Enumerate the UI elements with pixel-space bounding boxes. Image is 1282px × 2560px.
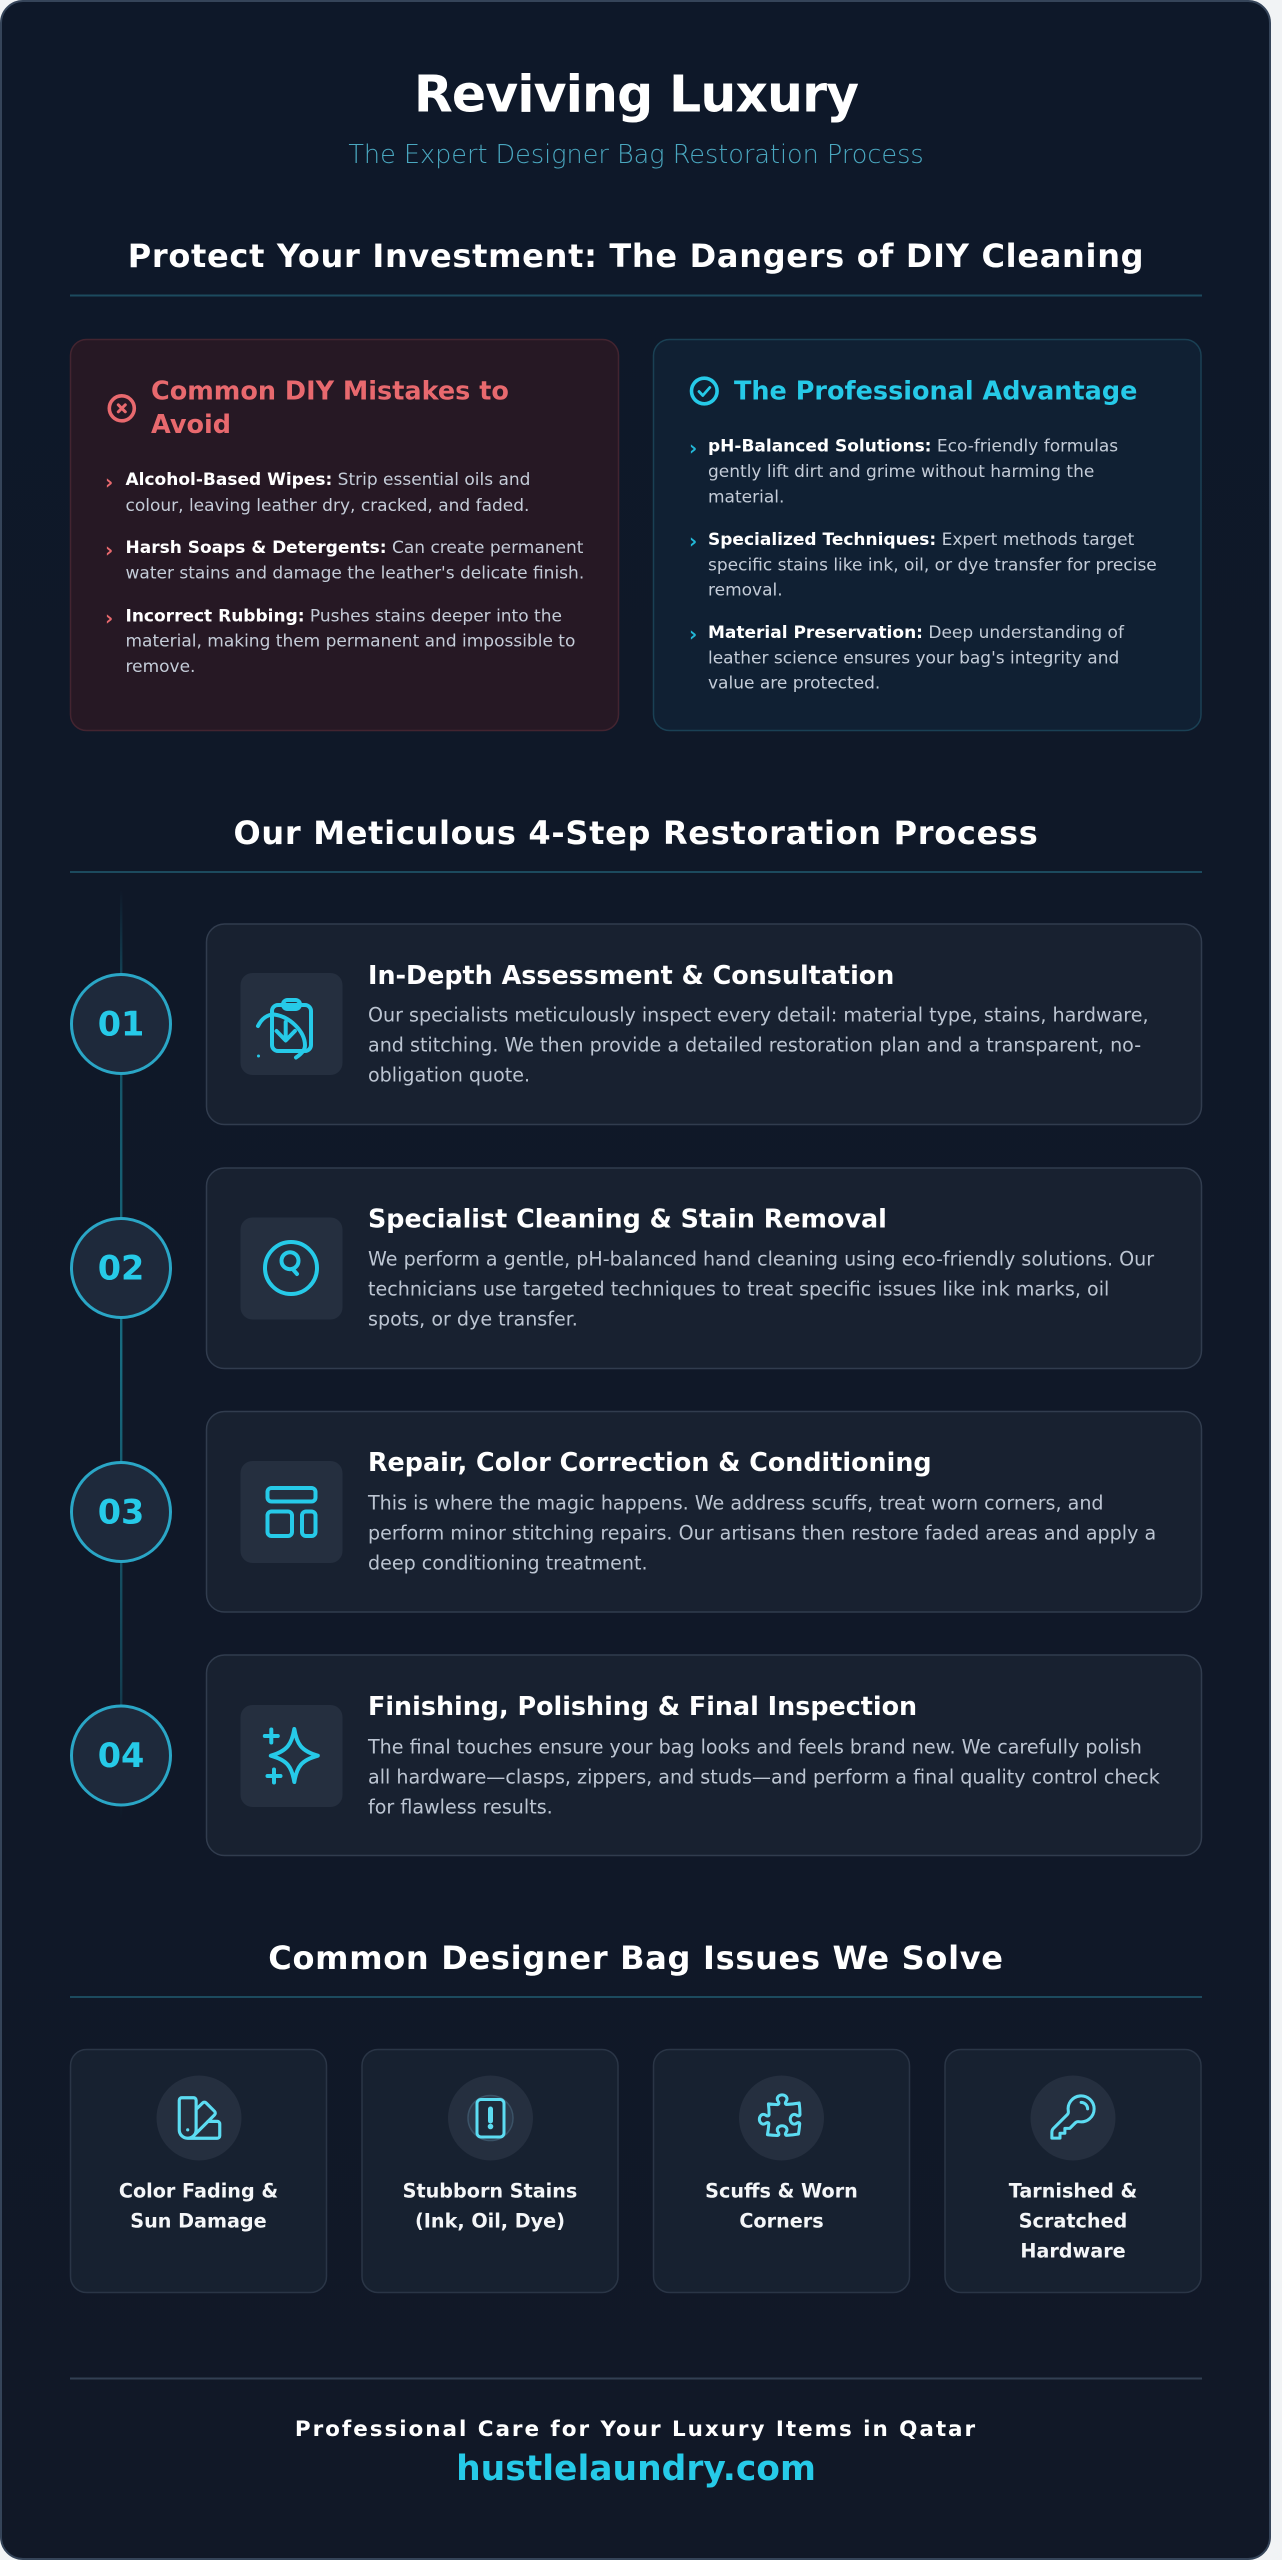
step 4 text: for flawless results. bbox=[368, 1795, 553, 1818]
advantage list: leather science ensures your bag's integrity and bbox=[708, 648, 1119, 668]
advantage list: › bbox=[689, 622, 697, 646]
label: Scratched bbox=[1019, 2209, 1127, 2232]
icon: alert device bbox=[448, 2076, 533, 2160]
advantage list bbox=[689, 436, 1157, 694]
step 3 text: This is where the magic happens. We address scuffs, treat worn corners, and bbox=[367, 1491, 1104, 1514]
subtitle: The Expert Designer Bag Restoration Process bbox=[348, 140, 924, 170]
mistakes list: water stains and damage the leather's delicate finish. bbox=[126, 564, 584, 584]
step 1 card bbox=[206, 924, 1202, 1124]
step 3 number bbox=[72, 1462, 170, 1562]
advantage list: gently lift dirt and grime without harming the bbox=[708, 462, 1094, 482]
step 1 number bbox=[72, 974, 170, 1074]
label bbox=[403, 2179, 577, 2232]
mistakes list: Alcohol-Based Wipes: Strip essential oils and bbox=[126, 470, 530, 490]
label: Color Fading & bbox=[119, 2179, 278, 2202]
panel: common DIY mistakes bbox=[70, 340, 618, 730]
panel: professional advantage bbox=[654, 340, 1201, 730]
step 1 bbox=[72, 924, 1202, 1124]
icon: magnifier in circle bbox=[240, 1218, 342, 1320]
step 1 number: 01 bbox=[98, 1004, 144, 1044]
label: Scuffs & Worn bbox=[705, 2179, 858, 2202]
step 1 text: obligation quote. bbox=[368, 1064, 530, 1087]
label: Sun Damage bbox=[130, 2209, 267, 2232]
issue card: color fading bbox=[70, 2050, 326, 2292]
heading: dangers of DIY: Protect Your Investment: The Dangers of DIY Cleaning bbox=[128, 237, 1144, 275]
step 4 heading: Finishing, Polishing & Final Inspection bbox=[368, 1691, 917, 1721]
timeline line bbox=[120, 890, 122, 1820]
step 2 number: 02 bbox=[98, 1248, 144, 1288]
issue card: hardware bbox=[945, 2050, 1201, 2292]
mistakes list: Harsh Soaps & Detergents: Can create permanent bbox=[126, 538, 584, 558]
step 4 number bbox=[72, 1706, 170, 1805]
mistakes heading bbox=[151, 376, 509, 440]
step 3 heading: Repair, Color Correction & Conditioning bbox=[368, 1447, 932, 1477]
advantage list: › bbox=[689, 529, 697, 553]
step 2 bbox=[72, 1168, 1202, 1368]
advantage list: specific stains like ink, oil, or dye transfer for precise bbox=[708, 555, 1157, 575]
label: Corners bbox=[739, 2209, 824, 2232]
step 2 text: spots, or dye transfer. bbox=[368, 1308, 578, 1330]
mistakes list: remove. bbox=[126, 657, 195, 677]
icon: key bbox=[1030, 2076, 1116, 2160]
step 2 text: We perform a gentle, pH-balanced hand cleaning using eco-friendly solutions. Our bbox=[368, 1248, 1154, 1270]
mistakes list: › bbox=[105, 606, 113, 630]
issue card: scuffs bbox=[654, 2050, 910, 2292]
step 2 number bbox=[72, 1218, 170, 1318]
step 3 number: 03 bbox=[98, 1492, 144, 1532]
step 3 text: perform minor stitching repairs. Our artisans then restore faded areas and apply a bbox=[368, 1521, 1156, 1544]
mistakes list bbox=[105, 470, 584, 677]
issue card: stains bbox=[362, 2050, 618, 2292]
advantage heading: The Professional Advantage bbox=[734, 376, 1137, 406]
advantage list: Specialized Techniques: Expert methods target bbox=[708, 530, 1135, 550]
advantage list: › bbox=[689, 436, 697, 460]
step 1 text: Our specialists meticulously inspect every detail: material type, stains, hardware, bbox=[368, 1004, 1149, 1027]
step 3 text bbox=[367, 1491, 1156, 1574]
step 4 text: The final touches ensure your bag looks and feels brand new. We carefully polish bbox=[367, 1735, 1142, 1758]
icon: puzzle bbox=[739, 2076, 824, 2160]
step 3 text: deep conditioning treatment. bbox=[368, 1551, 648, 1574]
step 4 text: all hardware—clasps, zippers, and studs—and perform a final quality control check bbox=[368, 1765, 1160, 1788]
heading: common issues: Common Designer Bag Issues We Solve bbox=[268, 1939, 1004, 1977]
mistakes heading: Avoid bbox=[151, 410, 231, 440]
mistakes list: colour, leaving leather dry, cracked, and faded. bbox=[126, 496, 529, 516]
advantage list: value are protected. bbox=[708, 674, 880, 694]
step 2 text bbox=[368, 1248, 1154, 1330]
step 2 text: technicians use targeted techniques to treat specific issues like ink marks, oil bbox=[368, 1278, 1109, 1300]
advantage list: Material Preservation: Deep understanding of bbox=[708, 623, 1125, 643]
mistakes heading: Common DIY Mistakes to bbox=[151, 376, 509, 406]
mistakes list: material, making them permanent and impossible to bbox=[126, 632, 575, 652]
title: Reviving Luxury bbox=[414, 64, 858, 124]
footer tagline: Professional Care for Your Luxury Items in Qatar bbox=[295, 2417, 977, 2442]
icon: swatch bbox=[156, 2076, 242, 2160]
step 4 number: 04 bbox=[98, 1736, 144, 1775]
icon: clipboard bbox=[240, 973, 342, 1075]
footer divider bbox=[70, 2378, 1202, 2380]
icon: sparkle bbox=[240, 1705, 342, 1807]
mistakes list: Incorrect Rubbing: Pushes stains deeper into the bbox=[126, 607, 562, 627]
label bbox=[1009, 2179, 1137, 2262]
icon: x circle bbox=[109, 396, 134, 421]
icon: check circle bbox=[692, 378, 717, 404]
step 4 card bbox=[206, 1655, 1202, 1856]
advantage list: pH-Balanced Solutions: Eco-friendly formulas bbox=[708, 437, 1118, 457]
label: Stubborn Stains bbox=[403, 2179, 577, 2202]
label: Hardware bbox=[1020, 2239, 1126, 2262]
advantage list: removal. bbox=[708, 581, 783, 601]
label bbox=[705, 2179, 858, 2232]
step 4 bbox=[72, 1655, 1202, 1856]
step 2 heading: Specialist Cleaning & Stain Removal bbox=[368, 1204, 887, 1234]
footer website: hustlelaundry.com bbox=[456, 2449, 816, 2489]
step 3 card bbox=[206, 1412, 1202, 1612]
heading: 4-step process: Our Meticulous 4-Step Restoration Process bbox=[234, 814, 1038, 852]
step 4 text bbox=[367, 1735, 1160, 1818]
label: (Ink, Oil, Dye) bbox=[415, 2209, 565, 2232]
label: Tarnished & bbox=[1009, 2179, 1137, 2202]
mistakes list: › bbox=[105, 538, 113, 562]
step 1 text bbox=[368, 1004, 1149, 1087]
mistakes list: › bbox=[105, 470, 113, 494]
advantage list: material. bbox=[708, 487, 784, 507]
step 1 heading: In-Depth Assessment & Consultation bbox=[368, 960, 894, 990]
icon: layout blocks bbox=[240, 1461, 342, 1563]
step 1 text: and stitching. We then provide a detailed restoration plan and a transparent, no- bbox=[368, 1034, 1141, 1057]
label bbox=[119, 2179, 278, 2232]
step 3 bbox=[72, 1412, 1202, 1612]
step 2 card bbox=[206, 1168, 1202, 1368]
